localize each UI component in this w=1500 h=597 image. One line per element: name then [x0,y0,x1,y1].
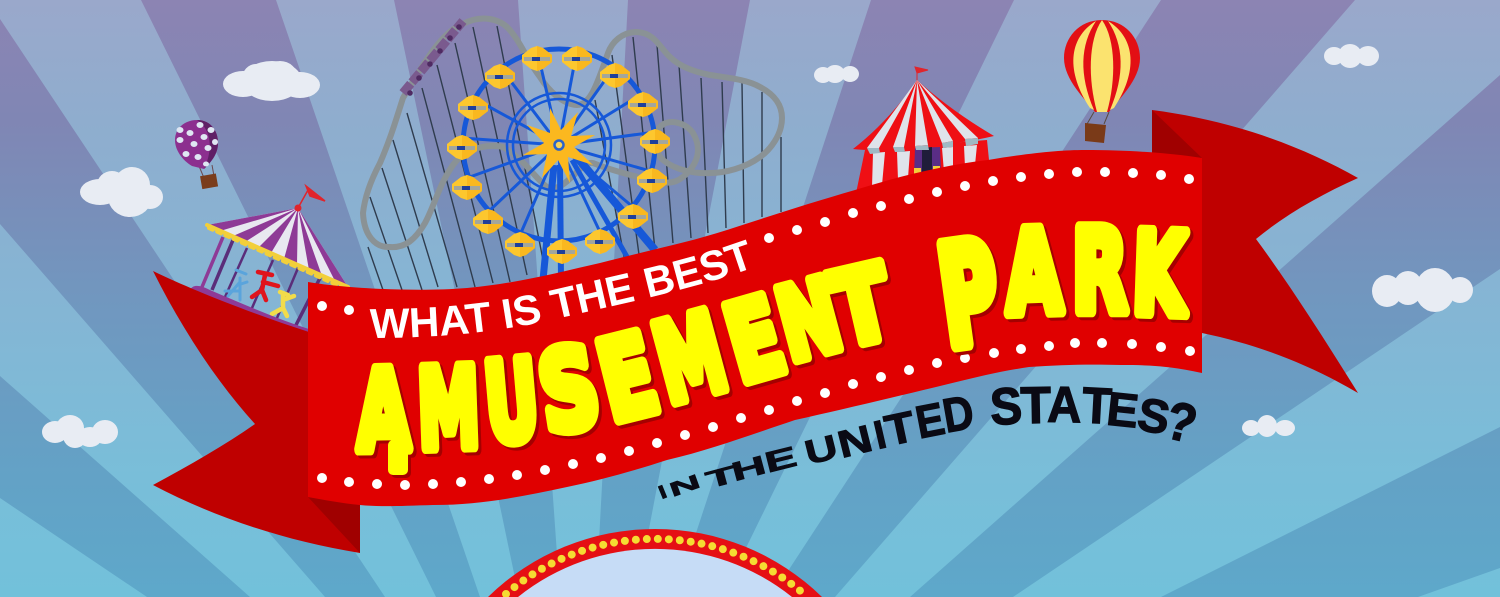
heading: in the united states: S [1134,388,1174,446]
heading: amusement park: E [587,310,669,447]
wheel rings [463,49,655,241]
heading: in the united states: U [801,428,842,472]
heading: amusement park: M [642,289,739,429]
heading: amusement park: A [356,346,411,476]
circus tent [853,67,994,198]
heading: what is the best: WHAT IS THE BEST [370,240,748,338]
wheel hub star [523,108,595,183]
heading: amusement park: K [1131,208,1190,341]
icon: purple hot air balloon [175,120,218,189]
heading: in the united states: D [938,384,978,443]
tent walls [855,140,990,198]
heading: amusement park: T [821,242,903,371]
ferris wheel [447,46,670,280]
heading: amusement park: S [531,323,608,458]
heading: amusement park: E [713,274,797,408]
heading: in the united states: ? [1160,389,1203,455]
carousel roof [207,204,348,289]
banner marquee dots [317,167,1195,490]
wheel legs [543,155,655,280]
heading: amusement park: N [766,257,853,385]
tent curtain tie-backs [914,166,940,175]
heading: in the united states: T [1081,377,1113,435]
wheel gondolas [447,46,670,264]
heading: amusement park: P [930,212,1009,379]
carousel base [190,286,312,340]
bottom marquee circle [488,529,822,597]
carousel horses [225,270,294,316]
carousel [190,186,348,340]
carousel poles [202,237,320,327]
ribbon: right tail [1152,110,1358,393]
coaster track [363,19,782,247]
icon: red and yellow hot air balloon [1064,20,1140,143]
heading: in the united states: E [761,440,800,479]
wheel spokes [462,50,655,242]
heading: in the united states: S [989,376,1024,436]
heading: in the united states [655,376,1203,504]
tent curtain [914,147,941,176]
heading: amusement park: U [480,337,544,469]
ribbon: left tail [153,271,360,553]
heading: amusement park [356,207,1190,476]
coaster train [403,21,463,96]
roller coaster [363,19,782,290]
heading: in the united states: A [1047,377,1082,434]
heading: amusement park: A [1004,207,1064,340]
heading: in the united states: N [833,417,877,467]
coaster supports [368,26,781,290]
heading: in the united states: T [703,461,739,494]
clouds [42,44,1473,448]
heading: in the united states: H [728,450,769,487]
tent roof [853,80,994,154]
heading: in the united states: T [881,402,919,455]
heading: in the united states: I [655,481,670,504]
heading: in the united states: N [666,470,704,502]
heading: in the united states: T [1020,376,1051,434]
heading: amusement park: R [1072,207,1128,339]
heading: in the united states: E [1104,383,1141,439]
ribbon: main banner [308,150,1202,506]
heading: in the united states: E [911,393,949,449]
heading: amusement park: M [416,345,482,475]
carousel flag [298,186,325,208]
tent flag [915,67,928,80]
heading: in the united states: I [870,413,890,458]
